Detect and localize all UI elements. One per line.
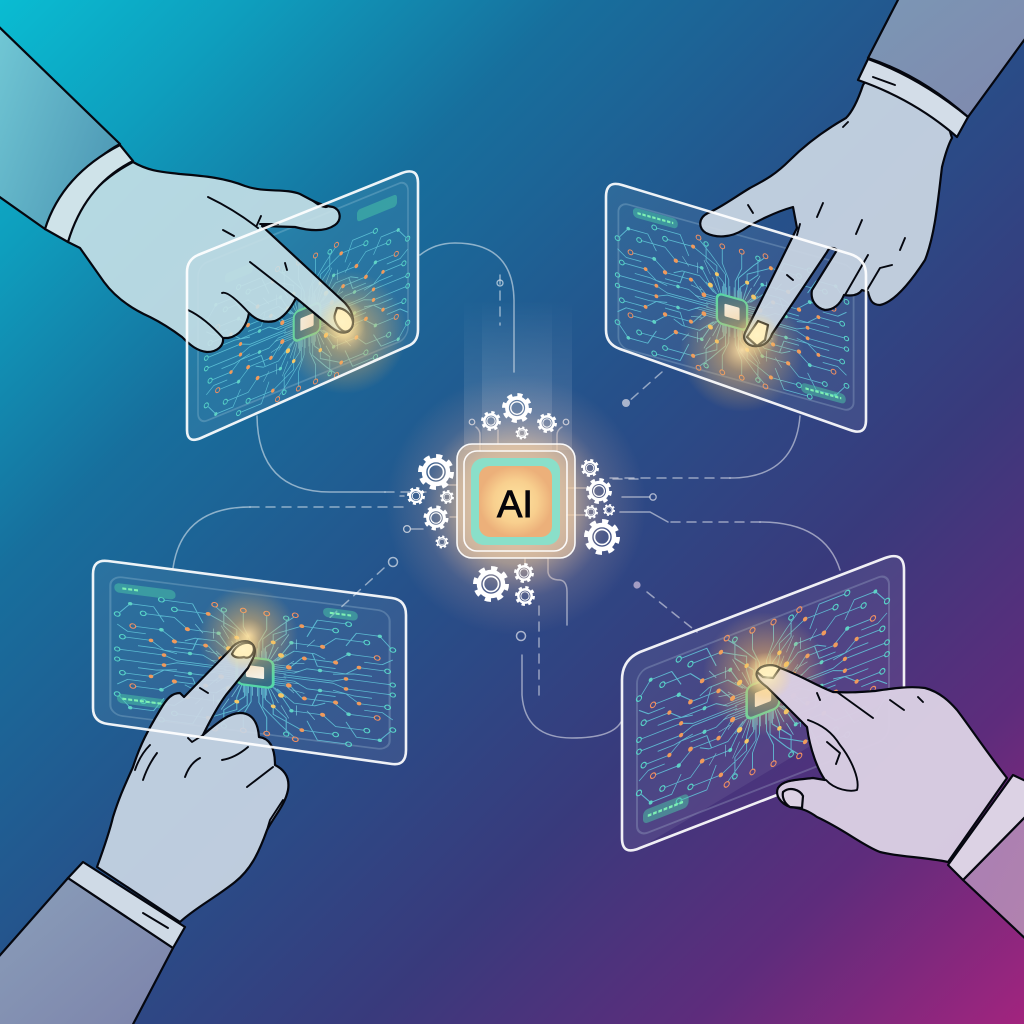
gears around chip bbox=[408, 396, 617, 604]
light beam above chip bbox=[464, 300, 572, 450]
panel: top-right circuit screen bbox=[606, 184, 866, 432]
central glow bbox=[386, 375, 646, 635]
hand: bottom-right bbox=[744, 652, 1024, 943]
panel border: top-right bbox=[606, 184, 866, 432]
panel: bottom-left circuit screen bbox=[93, 561, 406, 764]
central AI chip bbox=[457, 444, 575, 558]
hand: bottom-left bbox=[0, 630, 288, 1024]
hand: top-left bbox=[0, 22, 366, 352]
connector lines bbox=[173, 243, 840, 738]
panel border: bottom-right bbox=[622, 556, 904, 850]
panel: bottom-right circuit screen bbox=[622, 556, 904, 850]
panel border: bottom-left bbox=[93, 561, 406, 764]
panel: top-left circuit screen bbox=[187, 171, 418, 440]
panel border: top-left bbox=[187, 171, 418, 440]
AI label: AI bbox=[497, 484, 533, 526]
hand: top-right bbox=[700, 0, 1024, 357]
